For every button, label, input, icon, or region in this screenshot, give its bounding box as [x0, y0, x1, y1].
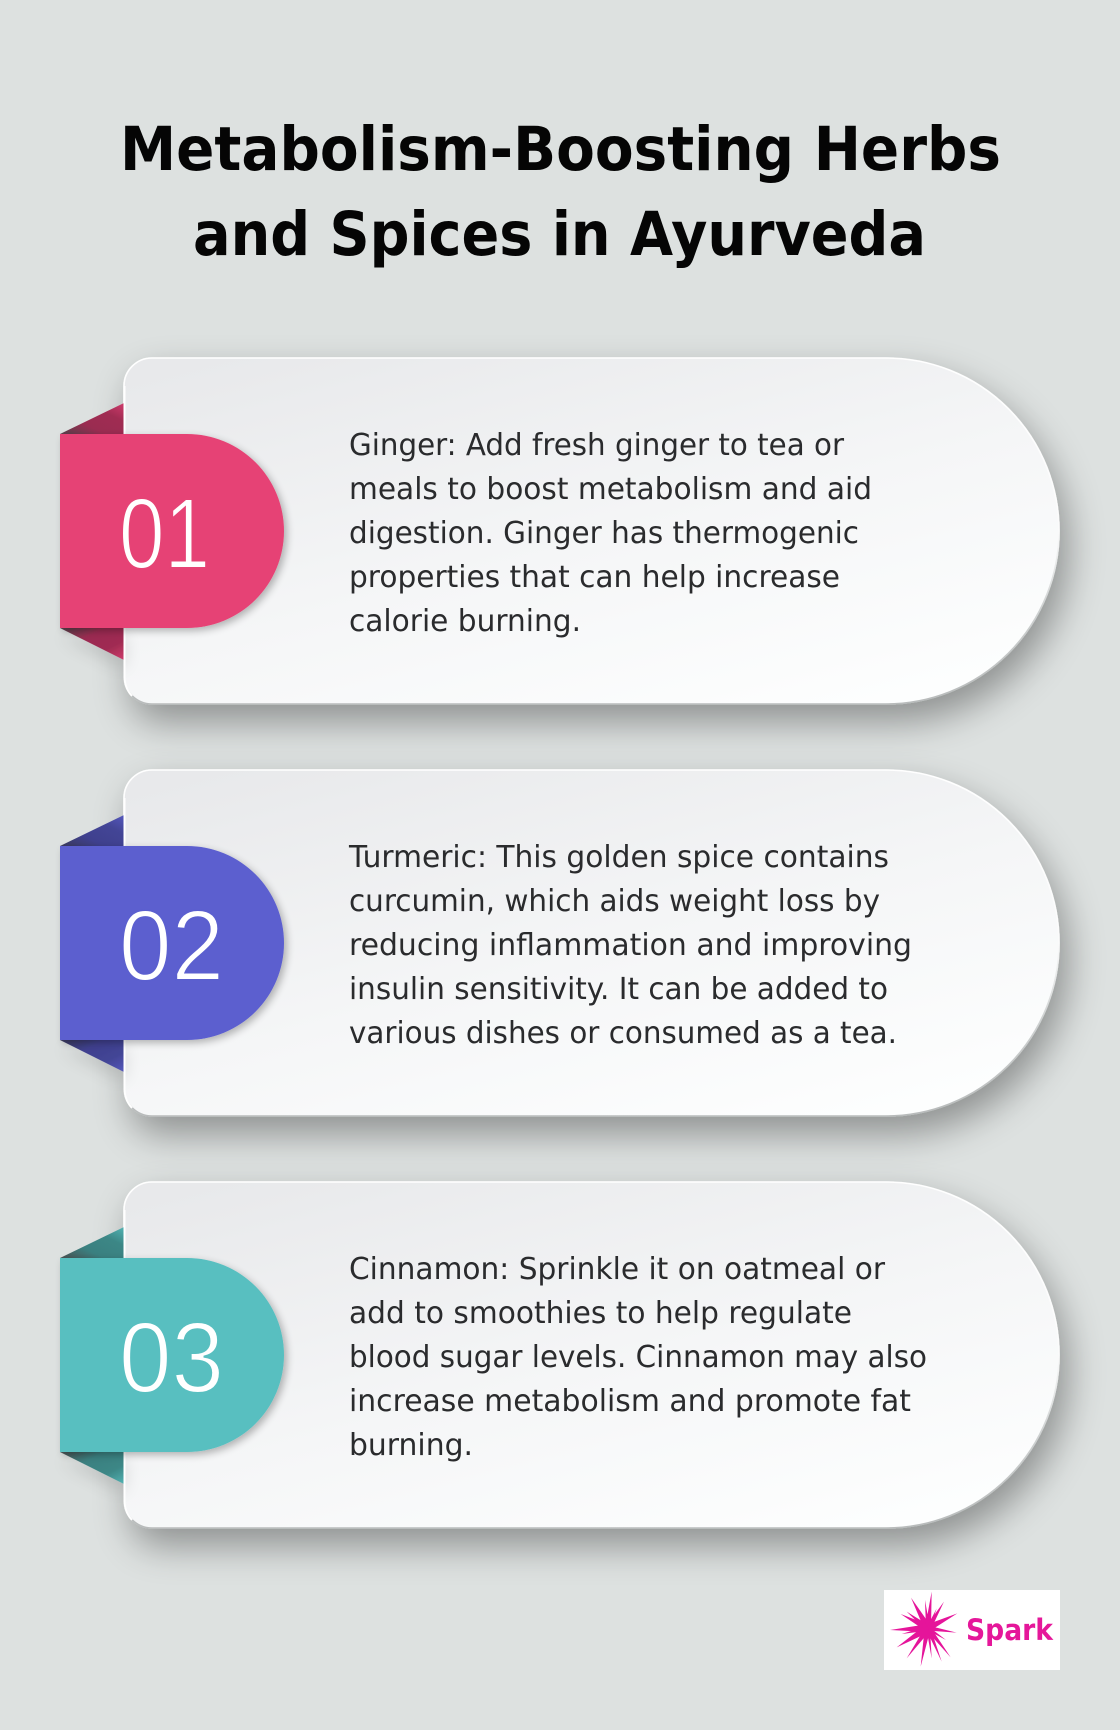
text: ginger: Ginger: Add fresh ginger to tea or — [349, 428, 845, 463]
text: cinnamon — [349, 1252, 927, 1463]
text: turmeric: reducing inflammation and improving — [349, 928, 912, 963]
card 03 left highlight — [124, 1210, 132, 1520]
text: ginger: meals to boost metabolism and aid — [349, 472, 872, 507]
text: cinnamon: blood sugar levels. Cinnamon may also — [349, 1340, 927, 1375]
text: ginger — [349, 428, 872, 639]
fold bottom 02 — [60, 1040, 124, 1072]
panel: step 03 cinnamon — [60, 1182, 1059, 1528]
icon: spark star — [890, 1592, 957, 1667]
text: cinnamon: burning. — [349, 1428, 473, 1463]
badge 02 — [60, 846, 284, 1040]
number 01: 01 — [119, 478, 210, 590]
title: and Spices in Ayurveda — [193, 199, 926, 270]
text: ginger: digestion. Ginger has thermogenic — [349, 516, 859, 551]
card 02 background — [124, 770, 1059, 1116]
badge 03 — [60, 1258, 284, 1452]
text: turmeric: various dishes or consumed as a tea. — [349, 1016, 897, 1051]
fold top 01 — [60, 403, 124, 434]
logo wordmark: Spark — [966, 1613, 1054, 1647]
text: cinnamon: Cinnamon: Sprinkle it on oatmeal or — [349, 1252, 886, 1287]
text: turmeric: curcumin, which aids weight loss by — [349, 884, 880, 919]
card 01 left highlight — [124, 386, 132, 696]
fold top 03 — [60, 1227, 124, 1258]
number 03: 03 — [119, 1302, 224, 1414]
text: ginger: calorie burning. — [349, 604, 581, 639]
text: turmeric — [348, 840, 912, 1051]
fold bottom 03 — [60, 1452, 124, 1484]
title: Metabolism-Boosting Herbs — [120, 114, 1001, 185]
panel: step 02 turmeric — [60, 770, 1059, 1116]
text: turmeric: Turmeric: This golden spice contains — [348, 840, 889, 875]
logo: Spark — [884, 1590, 1060, 1670]
card 01 background — [124, 358, 1059, 704]
text: cinnamon: increase metabolism and promote fat — [349, 1384, 911, 1419]
fold bottom 01 — [60, 628, 124, 660]
number 02: 02 — [119, 890, 224, 1002]
text: ginger: properties that can help increase — [349, 560, 840, 595]
card 02 left highlight — [124, 798, 132, 1108]
panel: step 01 ginger — [60, 358, 1059, 704]
text: cinnamon: add to smoothies to help regulate — [349, 1296, 852, 1331]
badge 01 — [60, 434, 284, 628]
text: turmeric: insulin sensitivity. It can be added to — [349, 972, 888, 1007]
title — [120, 114, 1001, 270]
fold top 02 — [60, 815, 124, 846]
card 03 background — [124, 1182, 1059, 1528]
